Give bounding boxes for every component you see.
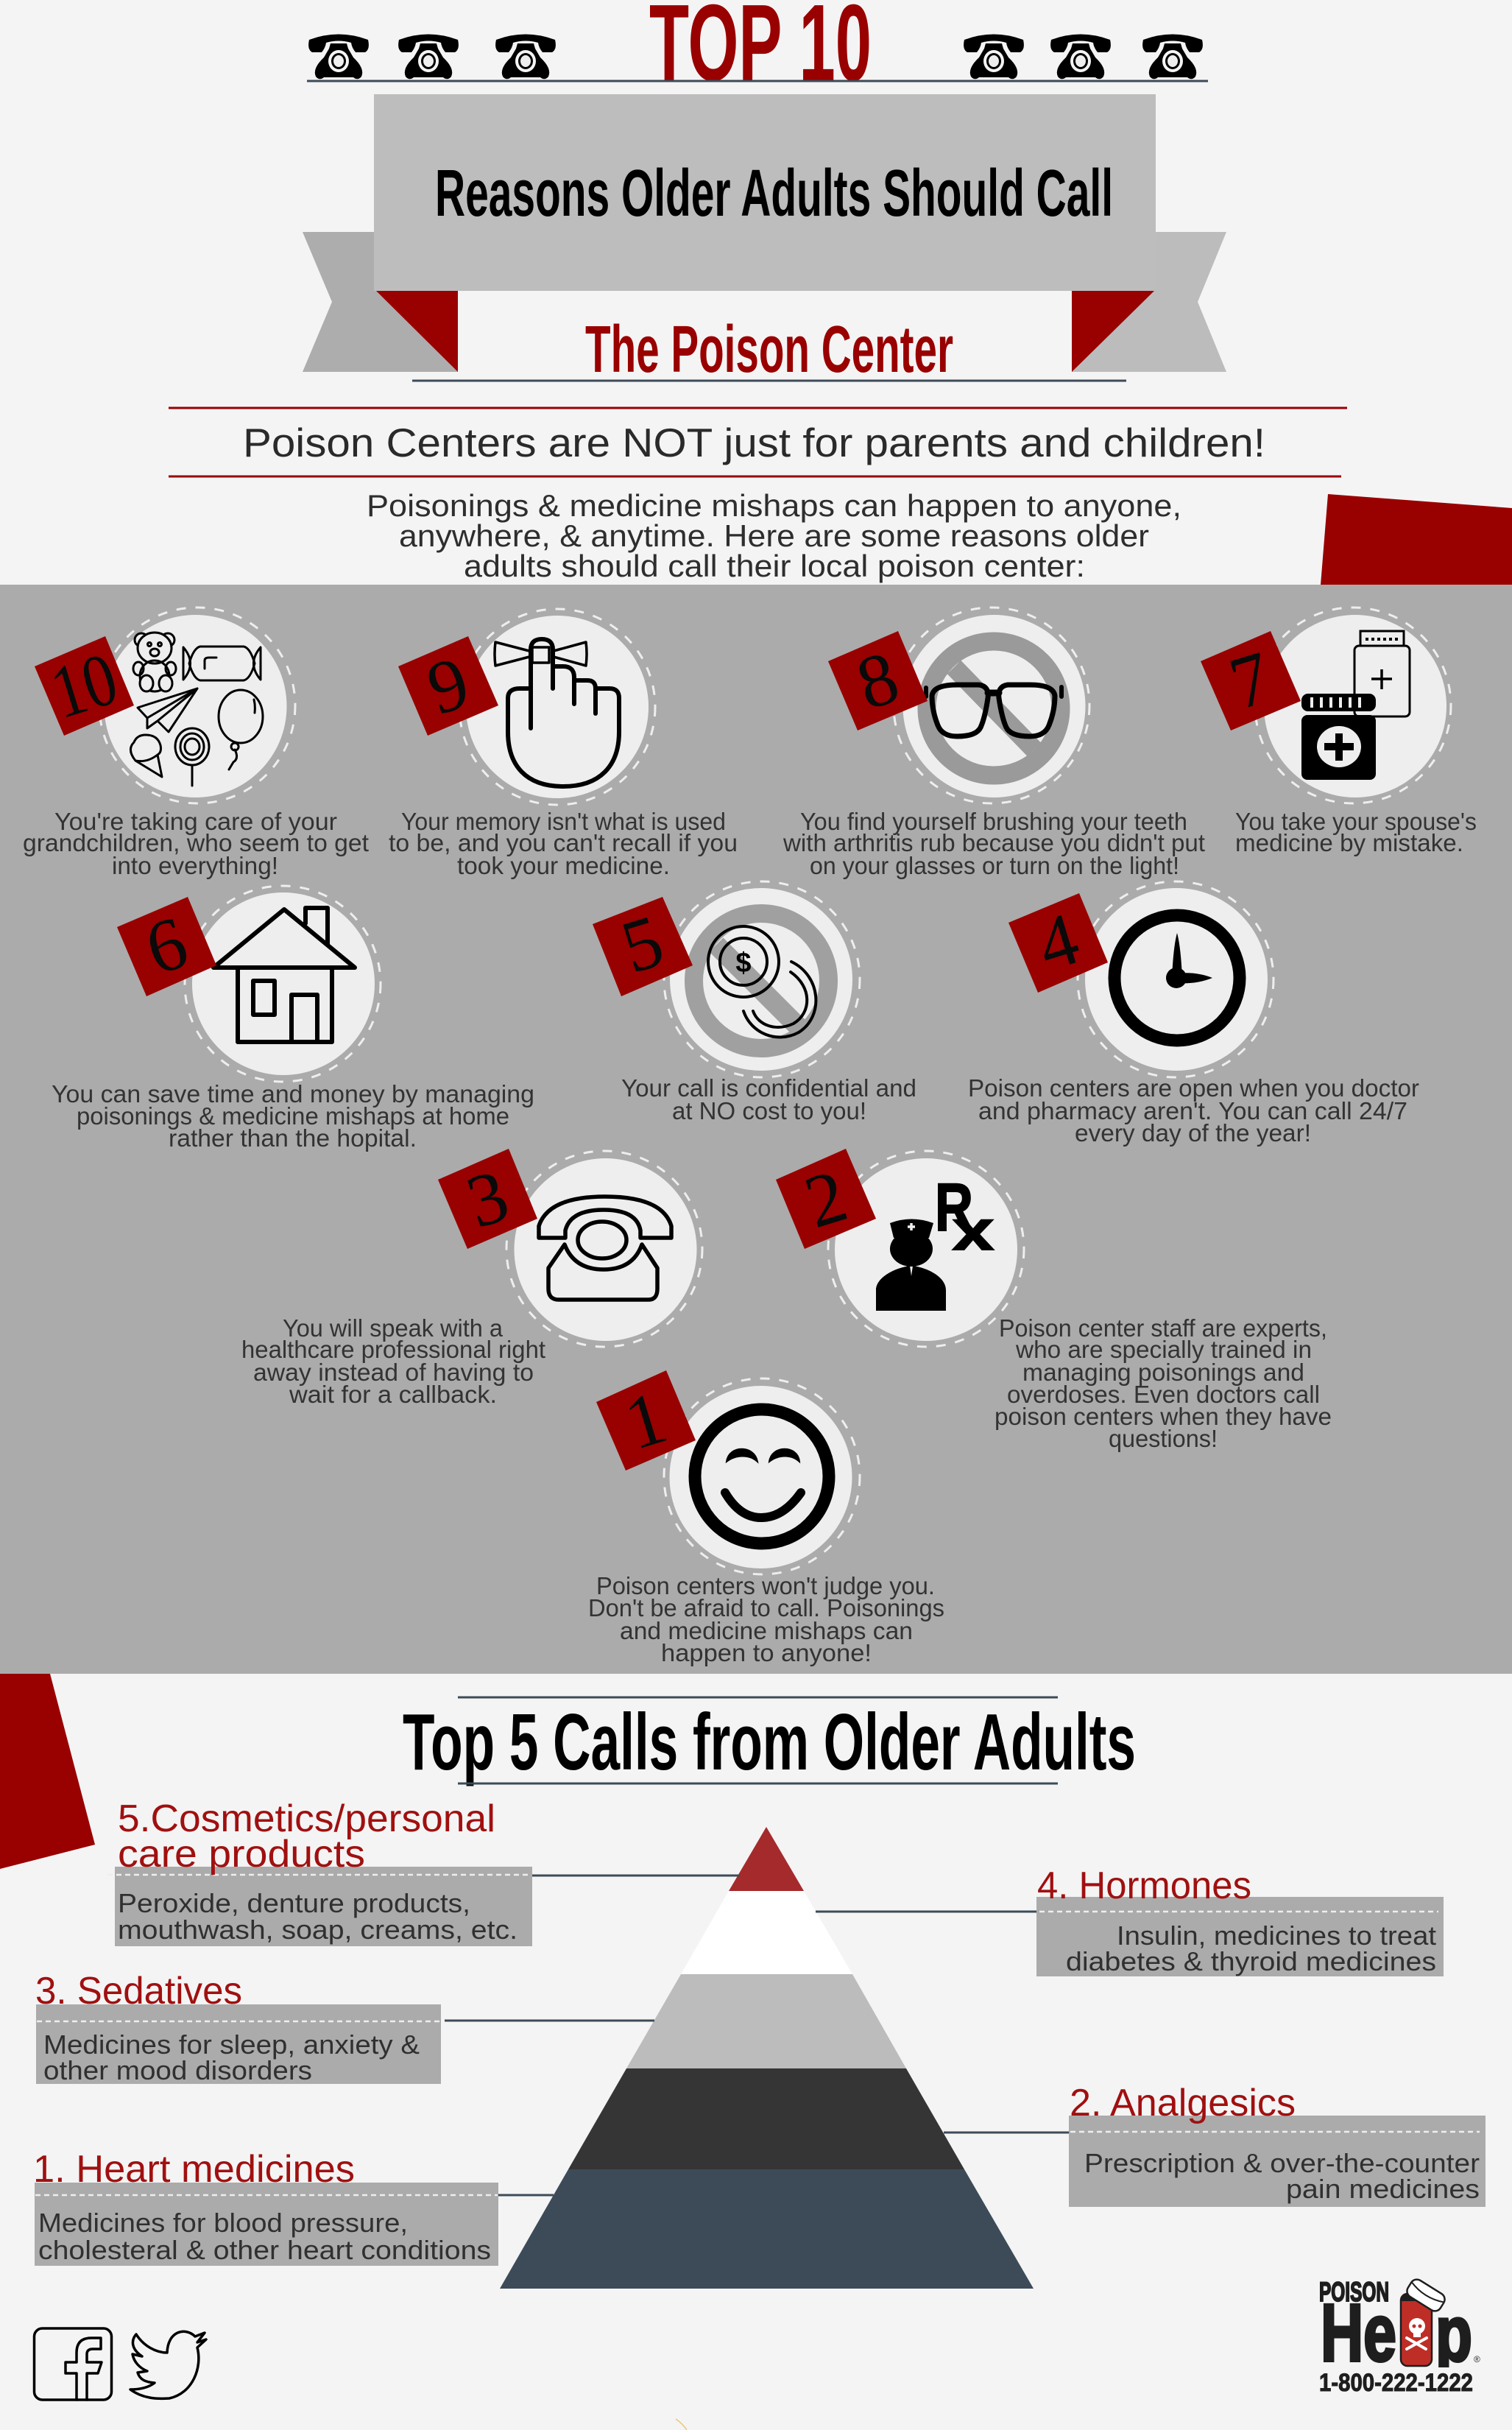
reason 3 text [241, 1314, 545, 1408]
icon: prohibited coin [693, 913, 829, 1049]
number badge 6: 6 [136, 901, 197, 991]
number badge 4 [1008, 893, 1108, 993]
reason 4 text [968, 1074, 1419, 1147]
header: top 10 with telephones [307, 0, 1208, 104]
ribbon tail right [1072, 232, 1226, 372]
callout text: Medicines for sleep, anxiety & [43, 2029, 420, 2060]
red corner bottom left [0, 1674, 95, 1869]
icon: hand with bow [495, 639, 619, 786]
reason 6 text: You can save time and money by managing [52, 1080, 534, 1107]
reason 2 text: questions! [1109, 1425, 1218, 1452]
icon: house [213, 908, 355, 1042]
ribbon tail left [303, 232, 458, 372]
number badge 8: 8 [847, 635, 908, 726]
callout text [38, 2208, 491, 2265]
panel: top 10 reasons [0, 585, 1512, 1674]
reason 7 text [1235, 808, 1477, 856]
circle [828, 1151, 1024, 1347]
circle [99, 608, 295, 803]
reason 1 [588, 1370, 944, 1666]
reason 2 text: poison centers when they have [995, 1403, 1332, 1430]
callout heading: 3. Sedatives [35, 1970, 242, 2012]
callout heading: care products [118, 1833, 365, 1876]
number badge 7: 7 [1220, 635, 1281, 726]
number badge 2 [776, 1149, 876, 1249]
reason 8 text: with arthritis rub because you didn't put [783, 829, 1205, 856]
icon: medicine bottles [1301, 631, 1410, 780]
number badge 2: 2 [796, 1154, 856, 1244]
reason 3 text: You will speak with a [283, 1314, 504, 1342]
ribbon main panel [374, 94, 1156, 291]
callout text [1066, 1920, 1436, 1976]
reason 10 text: grandchildren, who seem to get [23, 829, 369, 856]
callout: heart medicines [33, 2148, 554, 2266]
icon: telephones right [964, 34, 1203, 79]
panel background [0, 585, 1512, 1674]
title: the poison center: The Poison Center [585, 313, 953, 387]
icon: smiley face [695, 1409, 829, 1543]
number badge 9 [398, 636, 498, 736]
logo word p: p [1435, 2289, 1472, 2378]
callout text: Medicines for blood pressure, [38, 2208, 408, 2238]
icon: nurse with Rx: R [935, 1170, 973, 1245]
circle [664, 1378, 860, 1574]
reason 1 text: Poison centers won't judge you. [596, 1572, 935, 1599]
number badge 6 [117, 897, 216, 996]
icon: prohibited glasses [926, 641, 1061, 775]
logo: poison help [1319, 2277, 1480, 2397]
callout heading: 1. Heart medicines [33, 2148, 355, 2191]
reason 5 text: at NO cost to you! [672, 1097, 866, 1124]
logo phone number: 1-800-222-1222 [1319, 2369, 1473, 2397]
number badge 5: 5 [612, 899, 673, 990]
icon: telephones left [308, 34, 556, 79]
circle [1255, 608, 1451, 803]
reason 3 text: away instead of having to [253, 1359, 534, 1386]
reason 1 text [588, 1572, 944, 1666]
reason 8 text: You find yourself brushing your teeth [800, 808, 1187, 835]
reason 4 [968, 881, 1419, 1147]
icon: nurse with Rx: x [953, 1200, 994, 1262]
callout text: diabetes & thyroid medicines [1066, 1946, 1436, 1976]
reason 1 text: Don't be afraid to call. Poisonings [588, 1594, 944, 1621]
reason 9 text: took your medicine. [457, 852, 670, 879]
logo registered mark: ® [1474, 2354, 1480, 2364]
reason 2 text: who are specially trained in [1015, 1336, 1312, 1363]
callout text: other mood disorders [43, 2055, 312, 2085]
reason 10 text: You're taking care of your [54, 808, 337, 835]
callout text [43, 2029, 420, 2085]
circle [664, 881, 860, 1077]
callout text: Prescription & over-the-counter [1084, 2148, 1480, 2178]
icon: telephone outline [539, 1197, 671, 1300]
banner ribbon [303, 94, 1226, 387]
ribbon fold right [1072, 291, 1154, 372]
number badge 10: 10 [42, 637, 127, 735]
reason 6 text: poisonings & medicine mishaps at home [77, 1102, 509, 1130]
pyramid tier 4 [681, 1891, 852, 1974]
reason 8 text [783, 808, 1205, 879]
callout text: pain medicines [1286, 2174, 1480, 2204]
circle [459, 609, 655, 805]
ribbon fold left [376, 291, 458, 372]
reason 3 text: healthcare professional right [241, 1336, 545, 1363]
number badge 3: 3 [458, 1154, 517, 1244]
callout heading: 2. Analgesics [1070, 2082, 1296, 2124]
icon: nurse with Rx [876, 1170, 994, 1311]
logo bottle [1401, 2277, 1447, 2366]
reason 8 [783, 608, 1205, 879]
circle [506, 1151, 702, 1347]
heading text: Top 5 Calls from Older Adults [403, 1697, 1136, 1787]
intro text: adults should call their local poison center: [464, 549, 1085, 583]
small yellow arc at bottom edge [676, 2419, 687, 2430]
reason 7 [1201, 608, 1477, 856]
reason 9 [389, 609, 738, 879]
icon: toys [130, 633, 263, 786]
reason 7 text: You take your spouse's [1235, 808, 1477, 835]
icon: facebook [34, 2328, 112, 2400]
subheading text: Poison Centers are NOT just for parents and children! [243, 420, 1265, 465]
icon: clock [1114, 915, 1240, 1040]
reason 10 text [23, 808, 369, 879]
pyramid tier 1 [500, 2169, 1034, 2289]
reason 4 text: Poison centers are open when you doctor [968, 1074, 1419, 1102]
reason 9 text [389, 808, 738, 879]
reason 5 text: Your call is confidential and [621, 1074, 916, 1102]
reason 2 [776, 1149, 1332, 1452]
reason 6 text [52, 1080, 534, 1152]
reason 6 text: rather than the hopital. [169, 1124, 417, 1152]
number badge 3 [438, 1149, 537, 1249]
callout text: cholesteral & other heart conditions [38, 2235, 491, 2265]
number badge 1 [596, 1370, 696, 1471]
number badge 9: 9 [418, 641, 478, 731]
reason 7 text: medicine by mistake. [1235, 829, 1463, 856]
callout text [118, 1888, 517, 1945]
reason 8 text: on your glasses or turn on the light! [810, 852, 1179, 879]
callout: hormones [816, 1864, 1444, 1976]
icon: twitter [130, 2331, 206, 2398]
number badge 1: 1 [615, 1376, 676, 1466]
reason 1 text: and medicine mishaps can [620, 1617, 913, 1644]
callout heading: 4. Hormones [1037, 1864, 1251, 1907]
circle [1078, 881, 1273, 1077]
callout: cosmetics [107, 1797, 740, 1946]
callout: sedatives [35, 1970, 654, 2085]
circle [185, 886, 381, 1082]
reason 4 text: every day of the year! [1075, 1119, 1311, 1147]
intro text: Poisonings & medicine mishaps can happen to anyone, [367, 488, 1181, 523]
number badge 7 [1201, 631, 1301, 730]
reason 2 text: overdoses. Even doctors call [1007, 1381, 1320, 1408]
reason 10 text: into everything! [112, 852, 278, 879]
number badge 5 [593, 897, 693, 996]
callout text [1084, 2148, 1480, 2204]
ribbon centre white gap [458, 291, 1072, 379]
callout heading: 5.Cosmetics/personal [118, 1797, 495, 1840]
callout heading [118, 1797, 495, 1876]
reason 10 [23, 608, 369, 879]
reason 2 text: managing poisonings and [1022, 1359, 1304, 1386]
reason 5 text [621, 1074, 916, 1124]
pyramid chart [500, 1827, 1034, 2289]
title: reasons: Reasons Older Adults Should Call [435, 157, 1113, 230]
circle [894, 608, 1089, 803]
intro text: anywhere, & anytime. Here are some reasons older [399, 518, 1149, 553]
reason 3 text: wait for a callback. [289, 1381, 497, 1408]
reason 2 text [995, 1314, 1332, 1452]
reason 4 text: and pharmacy aren't. You can call 24/7 [978, 1097, 1407, 1124]
pyramid tier 2 [568, 2068, 964, 2169]
number badge 8 [828, 631, 928, 730]
reason 9 text: to be, and you can't recall if you [389, 829, 738, 856]
callout text: Insulin, medicines to treat [1117, 1920, 1436, 1951]
number badge 4: 4 [1028, 897, 1088, 987]
callout text: Peroxide, denture products, [118, 1888, 470, 1918]
reason 1 text: happen to anyone! [661, 1639, 872, 1666]
reason 9 text: Your memory isn't what is used [401, 808, 726, 835]
icon: prohibited coin: $ [735, 948, 752, 979]
reason 2 text: Poison center staff are experts, [999, 1314, 1327, 1342]
pyramid tier 5 [729, 1827, 804, 1891]
callout: analgesics [944, 2082, 1485, 2207]
callout text: mouthwash, soap, creams, etc. [118, 1915, 517, 1945]
reason 6 [52, 886, 534, 1152]
reason 3 [241, 1149, 702, 1408]
logo word he: He [1321, 2288, 1396, 2378]
intro text [367, 488, 1181, 583]
pyramid tier 3 [626, 1974, 906, 2068]
reason 5 [593, 881, 916, 1124]
logo word poison: POISON [1319, 2277, 1389, 2307]
red corner top right [1321, 494, 1512, 585]
